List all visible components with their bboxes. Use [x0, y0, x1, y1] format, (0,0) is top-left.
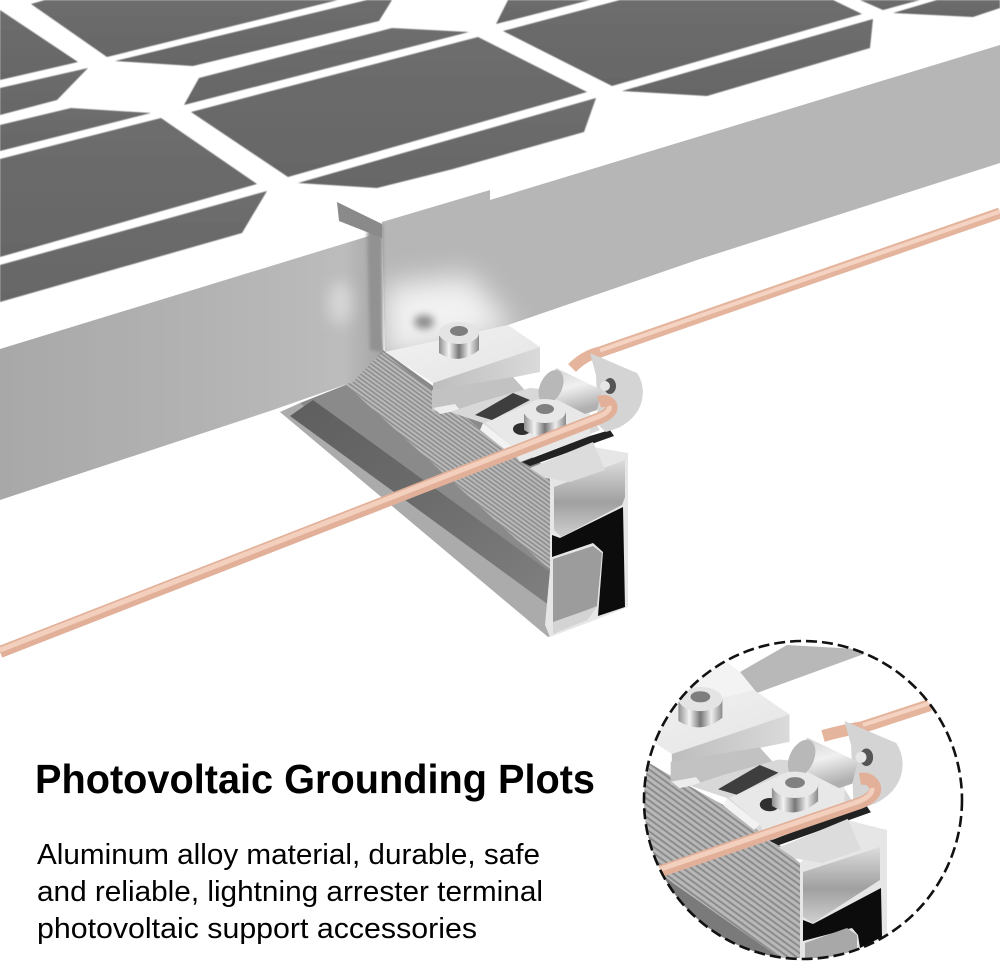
description text: Aluminum alloy material, durable, safe	[37, 839, 540, 871]
rail ribbed side face	[345, 352, 550, 570]
lower hex bolt	[524, 399, 566, 436]
inset rail dark band	[665, 876, 776, 956]
rail lower lip	[280, 403, 612, 637]
solar panel cells	[0, 0, 1000, 302]
lower clamp with slot	[450, 388, 614, 482]
clamp shading	[328, 275, 515, 360]
title: Photovoltaic Grounding Plots	[35, 756, 595, 802]
inset clamp hardware	[654, 687, 902, 862]
inset detail circle	[619, 641, 962, 959]
wire clip cylinder	[533, 366, 616, 414]
upper hex bolt	[439, 322, 479, 359]
inset magnified view	[619, 642, 930, 958]
wire terminal bracket	[590, 353, 643, 432]
inset dashed outline	[644, 641, 962, 959]
front copper wire	[0, 401, 612, 652]
inset front wire	[658, 779, 875, 872]
description text: and reliable, lightning arrester terminal	[37, 876, 543, 908]
description text: photovoltaic support accessories	[37, 913, 477, 945]
clamp tooth and vertical web	[337, 202, 383, 352]
panel frame right of clamp	[382, 45, 1000, 352]
panel frame left of clamp	[0, 236, 383, 500]
mounting rail	[280, 350, 628, 637]
clamp base plate	[385, 325, 540, 414]
inset rear wire	[823, 703, 930, 736]
rail end profile	[545, 447, 628, 637]
inset rail end profile	[800, 820, 887, 958]
clamp hardware	[385, 322, 643, 482]
description text	[37, 839, 543, 945]
rear copper wire	[572, 212, 1000, 368]
inset rail ribbed face	[644, 760, 800, 958]
inset frame and clamp top	[676, 645, 865, 708]
rail shaded underside	[300, 350, 600, 622]
rail dark band	[290, 400, 600, 622]
